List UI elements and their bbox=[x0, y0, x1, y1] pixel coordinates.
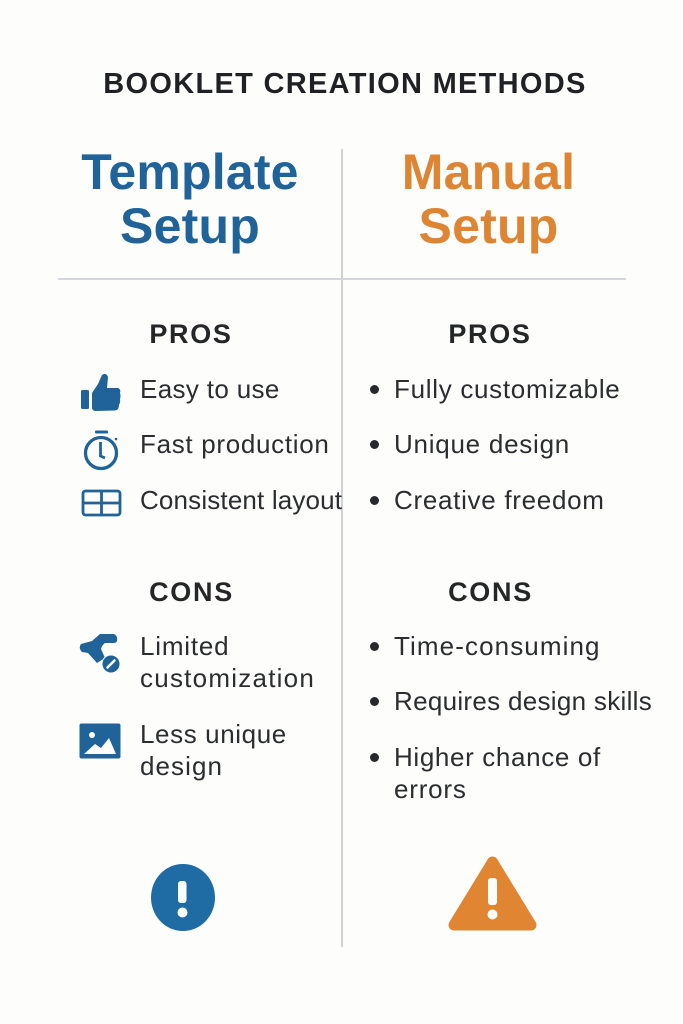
heading: Manual Setup: Setup bbox=[419, 198, 558, 254]
text: easy to use: Easy to use bbox=[140, 374, 280, 404]
bullet item: requires design skills: Requires design skills bbox=[394, 686, 652, 716]
bullet item: higher chance of errors: errors bbox=[394, 774, 467, 804]
icon: blue exclamation circle bbox=[151, 864, 215, 931]
subheading: manual pros: PROS bbox=[448, 319, 532, 349]
bullet item: higher chance of errors: Higher chance of bbox=[394, 742, 601, 772]
panel: manual pros bbox=[370, 319, 620, 515]
heading: Template Setup: Setup bbox=[120, 198, 260, 254]
text: limited customization: Limited bbox=[140, 631, 229, 661]
horizontal divider bbox=[58, 278, 626, 280]
text: limited customization bbox=[140, 631, 315, 693]
icon: limited customization bbox=[80, 634, 120, 672]
title: BOOKLET CREATION METHODS bbox=[103, 68, 587, 100]
bullet item: higher chance of errors bbox=[370, 742, 601, 804]
panel: manual cons bbox=[370, 577, 652, 804]
subheading: manual cons: CONS bbox=[448, 577, 533, 607]
text: less unique design: design bbox=[140, 751, 223, 781]
vertical divider bbox=[341, 149, 342, 947]
icon: stopwatch bbox=[84, 430, 118, 470]
text: consistent layout: Consistent layout bbox=[140, 485, 342, 515]
text: less unique design: Less unique bbox=[140, 719, 287, 749]
bullet item: fully customizable: Fully customizable bbox=[394, 374, 620, 404]
heading: Manual Setup: Manual bbox=[402, 144, 575, 200]
text: less unique design bbox=[140, 719, 287, 781]
text: fast production: Fast production bbox=[140, 429, 330, 459]
panel: template cons bbox=[80, 577, 315, 781]
panel: template pros bbox=[81, 319, 342, 516]
icon: layout grid bbox=[82, 490, 122, 516]
bullet item: time-consuming: Time-consuming bbox=[394, 631, 601, 661]
heading: Template Setup: Template bbox=[81, 144, 299, 200]
heading: Template Setup bbox=[81, 144, 299, 254]
subheading: template cons: CONS bbox=[149, 577, 234, 607]
subheading: template pros: PROS bbox=[149, 319, 233, 349]
bullet item: creative freedom: Creative freedom bbox=[394, 485, 605, 515]
heading: Manual Setup bbox=[402, 144, 575, 254]
icon: orange warning triangle bbox=[448, 856, 536, 930]
icon: image bbox=[80, 724, 120, 758]
bullet item: unique design: Unique design bbox=[394, 429, 570, 459]
text: limited customization: customization bbox=[140, 663, 315, 693]
icon: thumbs up bbox=[81, 374, 120, 411]
